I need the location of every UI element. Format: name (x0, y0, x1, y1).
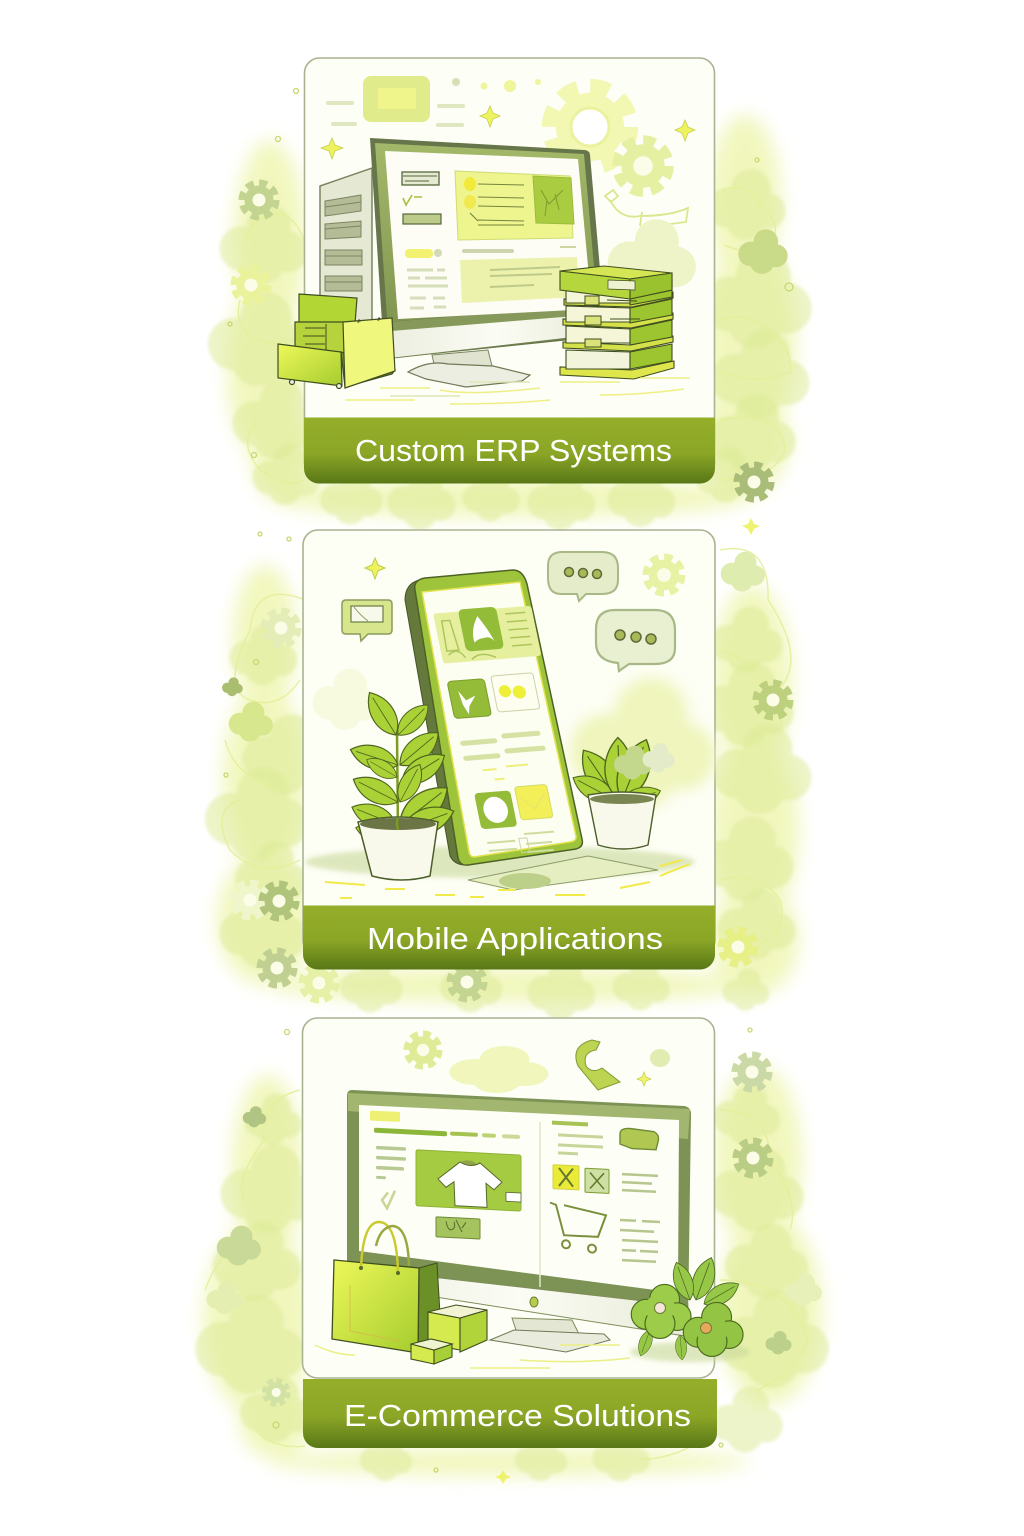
panel: E-Commerce Solutions (302, 1018, 750, 1448)
small decorative icons (312, 557, 716, 809)
illustration: flowers (630, 1254, 750, 1362)
card background (304, 58, 714, 478)
illustration: right potted plant (568, 734, 675, 849)
background: clouds behind ERP card (208, 115, 812, 530)
heading: Custom ERP Systems (355, 433, 672, 468)
chat bubble large (596, 610, 675, 671)
ribbon doodle (605, 190, 688, 228)
server tower (320, 168, 372, 328)
heading: Mobile Applications (367, 921, 663, 956)
background sparkles (224, 88, 793, 1484)
cloud behind books (608, 219, 696, 299)
phone screen content (433, 604, 581, 856)
card background (303, 530, 715, 955)
ground doodles and mat (305, 846, 695, 898)
background: clouds behind e-commerce card (196, 1055, 829, 1481)
illustration: monitor (347, 1090, 691, 1352)
icon: large gear (550, 87, 668, 192)
illustration: boxes (411, 1305, 487, 1364)
stack of green boxes (560, 266, 674, 379)
illustration: shopping bag (332, 1222, 441, 1353)
illustration: smartphone (405, 570, 582, 865)
illustration: monitor and server (278, 138, 690, 404)
illustration: left potted plant (347, 687, 458, 880)
screen (385, 151, 592, 319)
desk lines (315, 1345, 630, 1368)
heading: E-Commerce Solutions (344, 1398, 691, 1433)
panel: Mobile Applications (303, 530, 716, 970)
panel: Custom ERP Systems (278, 58, 715, 484)
monitor stand (408, 350, 530, 387)
card background (302, 1018, 714, 1378)
desk lines (345, 378, 690, 404)
screen content (402, 171, 579, 308)
label band (304, 418, 715, 484)
background: clouds behind mobile card (205, 549, 811, 1020)
chat bubble (548, 552, 618, 601)
icon: gear bottom right (737, 465, 771, 499)
boxes and shopping bag (278, 294, 395, 388)
label band (303, 1379, 717, 1448)
monitor body (370, 138, 604, 358)
top decoration (407, 1034, 670, 1093)
monitor screen content (370, 1110, 660, 1293)
monitor stand (512, 1318, 580, 1336)
label band (303, 906, 715, 970)
decorative icons at card top (321, 76, 695, 159)
monitor chin (390, 304, 604, 358)
monitor chin (352, 1268, 688, 1336)
